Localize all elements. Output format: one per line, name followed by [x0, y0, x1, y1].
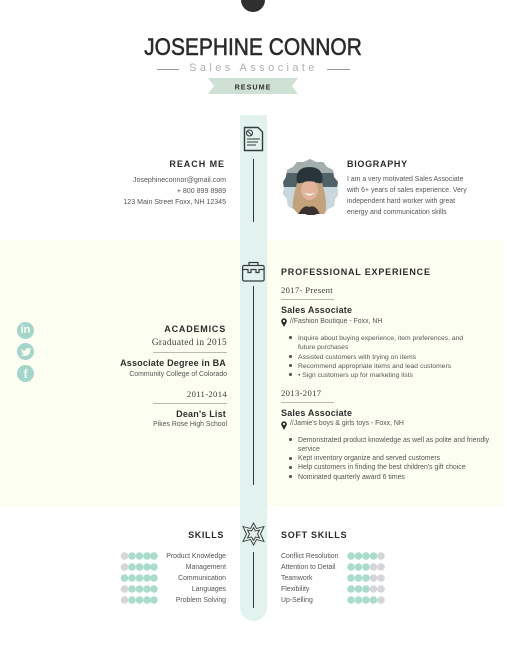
job 2 bullets: Kept inventory organize and served customers: [298, 455, 440, 462]
job 2 bullets: [298, 436, 489, 481]
contact details: 123 Main Street Foxx, NH 12345: [123, 199, 226, 206]
college: Community College of Colorado: [129, 370, 227, 378]
heading: reach me: REACH ME: [169, 159, 225, 169]
top semicircle: [241, 0, 265, 12]
skills rating dots: [120, 552, 158, 604]
job 2 bullets: Demonstrated product knowledge as well as polite and friendly: [298, 436, 489, 444]
icon: twitter: [17, 343, 34, 360]
icon: linkedin: [17, 322, 34, 339]
icon: linkedin: in: [21, 324, 30, 336]
photo: scalloped portrait: [283, 159, 338, 215]
skills labels: Product Knowledge: [166, 552, 226, 560]
icon: briefcase: [242, 262, 265, 282]
resume ribbon: RESUME: [235, 82, 271, 92]
biography text: independent hard worker with great: [347, 198, 455, 205]
job 2 pin icon: [281, 421, 287, 430]
job 2 bullets: Nominated quarterly award 6 times: [298, 474, 405, 481]
job 2: [281, 388, 489, 481]
job 1: [281, 285, 463, 379]
timeline line 2: [253, 286, 254, 485]
soft skills labels: Attention to Detail: [281, 564, 335, 571]
heading: soft skills: SOFT SKILLS: [281, 530, 347, 540]
school: Pikes Rose High School: [153, 420, 227, 428]
biography text: [347, 176, 467, 216]
academics block: [120, 324, 227, 428]
graduated date: Graduated in 2015: [152, 338, 227, 348]
dates: 2011-2014: [187, 389, 227, 399]
job 1 pin icon: [281, 318, 287, 327]
biography text: with 6+ years of sales experience. Very: [347, 187, 467, 194]
social icons: [17, 322, 34, 382]
skills labels: [166, 552, 226, 604]
contact details: [123, 176, 226, 206]
skills labels: Languages: [192, 586, 226, 593]
job 1 employer: //Fashion Boutique - Foxx, NH: [290, 318, 382, 324]
contact block: [123, 159, 226, 206]
job 1 bullets: Inquire about buying experience, item preferences, and: [298, 335, 463, 342]
title: name: JOSEPHINE CONNOR: [144, 34, 362, 61]
contact details: Josephineconnor@gmail.com: [133, 177, 226, 184]
skills labels: Problem Solving: [176, 597, 226, 604]
job 2 dates: 2013-2017: [281, 388, 321, 398]
heading: biography: BIOGRAPHY: [347, 159, 408, 169]
soft skills labels: Flexibility: [281, 586, 309, 593]
heading: professional experience: PROFESSIONAL EXPERIENCE: [281, 267, 431, 277]
biography block: [347, 159, 467, 216]
timeline line 1: [253, 159, 254, 222]
skills labels: Communication: [178, 575, 226, 582]
skills labels: Management: [186, 564, 226, 571]
job 2 employer: //Jamie's boys & girls toys - Foxx, NH: [290, 420, 404, 427]
soft skills labels: Up-Selling: [281, 597, 313, 604]
soft skills labels: Teamwork: [281, 575, 312, 582]
degree: Associate Degree in BA: [120, 358, 226, 368]
biography text: I am a very motivated Sales Associate: [347, 176, 463, 183]
icon: facebook: f: [24, 367, 28, 381]
award: Dean's List: [176, 408, 226, 418]
resume ribbon: [208, 78, 298, 94]
soft skills rating dots: [347, 552, 385, 604]
central timeline column: [240, 115, 267, 621]
job 1 bullets: • Sign customers up for marketing lists: [298, 372, 413, 379]
job 1 bullets: [298, 335, 463, 379]
soft skills labels: [281, 552, 338, 604]
job 1 bullets: Recommend appropriate items and lead customers: [298, 363, 451, 370]
job 1 title: Sales Associate: [281, 305, 352, 315]
job 2 bullets: service: [298, 446, 320, 453]
job 2 bullets: Help customers in finding the best children's gift choice: [298, 464, 466, 471]
job 1 bullets: future purchases: [298, 344, 348, 351]
biography text: energy and communication skills: [347, 209, 447, 216]
job 2 title: Sales Associate: [281, 408, 352, 418]
timeline line 3: [253, 552, 254, 608]
subtitle: job title: Sales Associate: [189, 62, 318, 74]
soft skills labels: Conflict Resolution: [281, 552, 338, 560]
contact details: + 800 899 8989: [177, 188, 226, 195]
job 1 bullets: Assisted customers with trying on items: [298, 354, 416, 361]
icon: star: [242, 522, 265, 546]
heading: skills: SKILLS: [188, 530, 224, 540]
heading: academics: ACADEMICS: [164, 324, 226, 334]
icon: facebook: [17, 365, 34, 382]
job 1 dates: 2017- Present: [281, 285, 333, 295]
icon: document: [244, 126, 264, 152]
cream background band: [0, 240, 504, 506]
